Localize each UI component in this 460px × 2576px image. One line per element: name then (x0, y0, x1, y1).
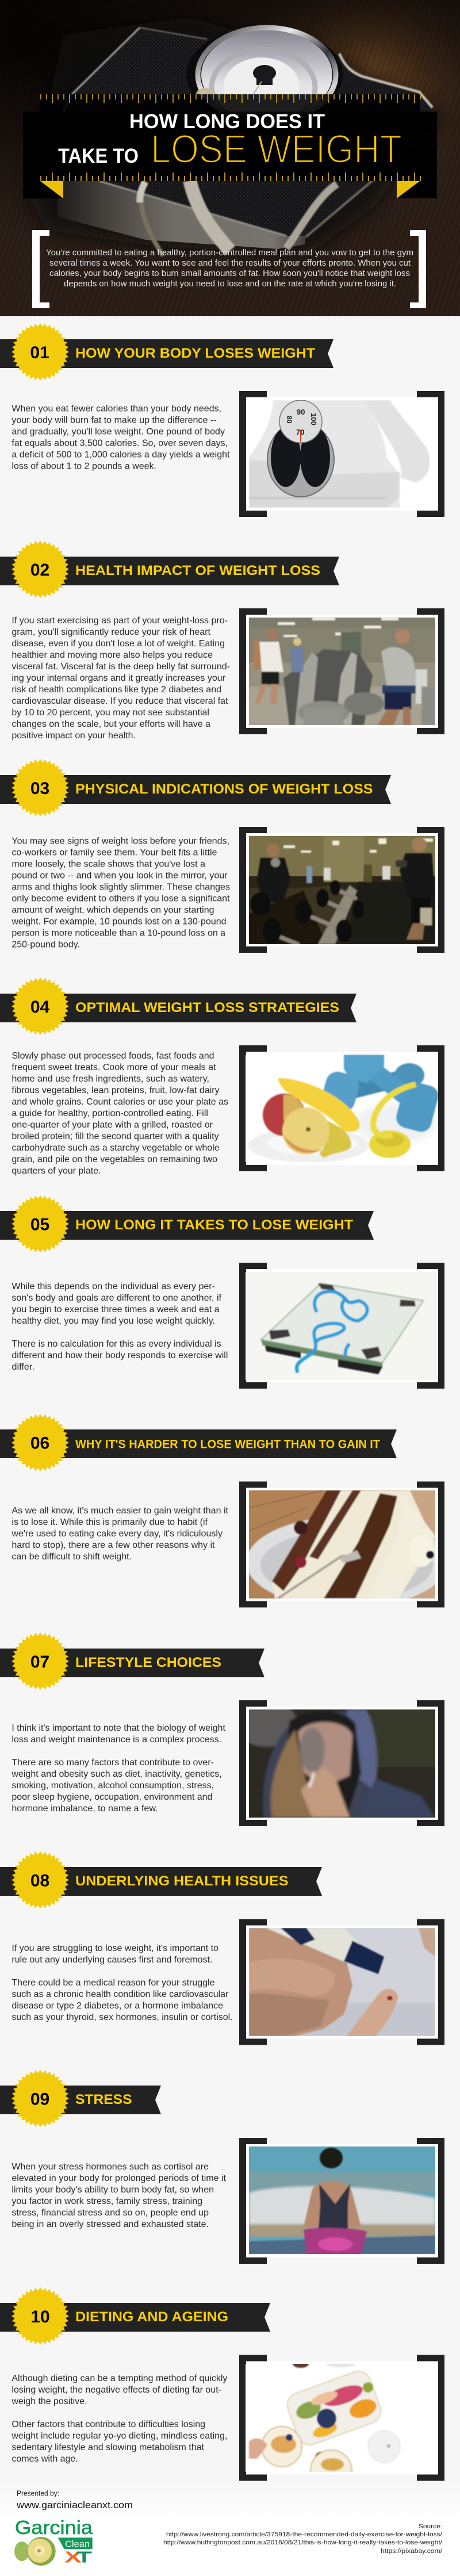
body text 07: There are so many factors that contribute to over- (12, 1758, 214, 1768)
ribbon heading 03: PHYSICAL INDICATIONS OF WEIGHT LOSS (75, 781, 373, 797)
intro text (46, 248, 413, 289)
man right (400, 853, 435, 899)
body text 02 (12, 616, 230, 741)
body text 10: Other factors that contribute to difficulties losing (12, 2420, 205, 2429)
body text 07: I think it's important to note that the biology of weight (12, 1723, 226, 1733)
body text 02: cardiovascular disease. If you reduce that visceral fat (12, 696, 228, 706)
plate (248, 1128, 369, 1163)
ribbon heading 07: LIFESTYLE CHOICES (75, 1655, 221, 1670)
number badge 10 (12, 2287, 69, 2345)
intro text: calories, your body begins to burn small amounts of fat. How soon you'll notice that weight loss (49, 269, 410, 278)
body text 07: smoking, motivation, alcohol consumption, stress, (12, 1781, 214, 1791)
ribbon heading 10: DIETING AND AGEING (75, 2309, 228, 2325)
section 10 (0, 2287, 444, 2491)
number badge 02 (12, 540, 69, 598)
ribbon heading 04 (0, 994, 356, 1022)
body text 07: hormone imbalance, to name a few. (12, 1804, 158, 1814)
section 01 (0, 323, 444, 517)
body text 09: limits your body's ability to burn body fat, so when (12, 2185, 214, 2195)
ribbon heading 09 (0, 2086, 161, 2114)
logo: Garcinia Clean XT: Garcinia (15, 2517, 93, 2538)
body text 01: fat equals about 3,500 calories. So, over seven days, (12, 438, 228, 448)
photo: gym ellipticals (249, 618, 435, 725)
number badge 03 (12, 759, 69, 816)
body text 08: such as a chronic health condition like cardiovascular (12, 1989, 229, 1999)
body text 03: 250-pound body. (12, 940, 80, 950)
banana (319, 1121, 351, 1158)
section 04 (0, 977, 444, 1176)
bracket frame 10 (239, 2355, 444, 2481)
number badge 04 (12, 977, 69, 1035)
footer credit: www.garciniacleanxt.com (16, 2500, 133, 2510)
photo: glass scale and blue tape (246, 1272, 438, 1380)
ribbon heading 05 (0, 1211, 374, 1240)
body text 06: hard to stop), there are a few other reasons why it (12, 1540, 215, 1550)
ribbon heading 01: HOW YOUR BODY LOSES WEIGHT (75, 346, 315, 361)
body text 02: changes on the scale, but your efforts will have a (12, 719, 210, 729)
logo: Garcinia Clean XT: Clean (65, 2539, 90, 2550)
number badge 08: 08 (30, 1871, 49, 1891)
source list (163, 2523, 443, 2555)
photo: dumbbell rack in gym (249, 836, 435, 944)
person left (259, 642, 283, 672)
logo: Garcinia Clean XT: T (76, 2548, 92, 2566)
body text 04: Slowly phase out processed foods, fast foods and (12, 1051, 214, 1061)
ribbon heading 03 (0, 775, 391, 804)
section 03 (0, 759, 444, 953)
ribbon heading 06: WHY IT'S HARDER TO LOSE WEIGHT THAN TO GAIN IT (75, 1438, 380, 1451)
source list: http://www.livestrong.com/article/375918-the-recommended-daily-exercise-for-weight-loss/ (166, 2531, 443, 2538)
section 09 (0, 2070, 444, 2264)
measuring tape (140, 91, 337, 256)
section 08 (0, 1851, 444, 2045)
number badge 01: 01 (30, 343, 49, 362)
body text 08: rule out any underlying causes first and foremost. (12, 1955, 212, 1965)
body text 06: can be difficult to shift weight. (12, 1552, 132, 1562)
body text 07 (11, 1723, 226, 1814)
body text 10: comes with age. (12, 2454, 78, 2464)
number badge 05 (12, 1195, 69, 1252)
ribbon heading 07 (0, 1649, 264, 1677)
body text 08: disease or type 2 diabetes, or a hormone imbalance (12, 2001, 223, 2011)
dumbbells (341, 1076, 409, 1094)
body text 10: weigh the positive. (11, 2397, 87, 2406)
number badge 06: 06 (30, 1434, 49, 1452)
body text 10: weight include regular yo-yo dieting, mindless eating, (11, 2431, 227, 2441)
body text 08: If you are struggling to lose weight, it's important to (12, 1943, 218, 1953)
photo: blood glucose lancet and finger (249, 1928, 435, 2036)
title (58, 110, 402, 171)
ribbon heading 08: UNDERLYING HEALTH ISSUES (75, 1873, 289, 1889)
bracket frame 08 (239, 1919, 444, 2045)
rack (249, 891, 327, 944)
scale illustration (267, 400, 334, 497)
ribbon heading 05: HOW LONG IT TAKES TO LOSE WEIGHT (75, 1217, 353, 1233)
scale illustration: 90 (297, 408, 305, 416)
body text 06: is to lose it. While this is primarily due to habit (if (12, 1517, 208, 1527)
body text 02: ing your internal organs and it greatly increases your (12, 673, 226, 683)
body text 03: You may see signs of weight loss before your friends, (12, 836, 229, 846)
body text 05: you begin to exercise three times a week and eat a (12, 1305, 220, 1314)
bracket frame 05 (239, 1263, 444, 1389)
body text 05: There is no calculation for this as every individual is (12, 1339, 221, 1349)
body text 01: and gradually, you'll lose weight. One pound of body (12, 427, 225, 436)
body text 04: one-quarter of your plate with a grilled, roasted or (12, 1120, 213, 1130)
body text 08: such as your thyroid, sex hormones, insulin or cortisol. (12, 2012, 233, 2022)
body text 05: son's body and goals are different to one another, if (12, 1293, 222, 1303)
body text 10: Although dieting can be a tempting method of quickly (12, 2374, 227, 2383)
section 02 (0, 540, 444, 741)
body text 03: more loosely, the scale shows that you've lost a (12, 859, 205, 869)
person right (381, 647, 419, 688)
source list: https://pixabay.com/ (381, 2548, 443, 2555)
number badge 05: 05 (30, 1216, 49, 1234)
body text 02: risk of health complications like type 2 diabetes and (12, 685, 221, 695)
red apple (263, 1094, 305, 1136)
body text 04 (12, 1051, 228, 1176)
body text 02: If you start exercising as part of your weight-loss pro- (12, 616, 228, 626)
ribbon heading 06 (0, 1429, 397, 1458)
yellow apple (282, 1107, 329, 1155)
body text 01: a deficit of 500 to 1,000 calories a day yields a weight (12, 450, 230, 459)
body text 02: positive impact on your health. (12, 731, 136, 741)
section 05 (0, 1195, 444, 1389)
body text 03: only become evident to others if you lose a significant (12, 894, 230, 904)
bracket frame 09 (239, 2138, 444, 2264)
logo: Garcinia Clean XT (14, 2517, 93, 2566)
body text 03: amount of weight, which depends on your starting (12, 905, 214, 915)
number badge 08 (12, 1851, 69, 1909)
photo: waist with scale (249, 400, 430, 508)
body text 02: healthier and moving more also helps you reduce (12, 650, 213, 660)
body text 01: When you eat fewer calories than your body needs, (12, 404, 221, 413)
body text 09: being in an overly stressed and exhausted state. (12, 2220, 209, 2229)
body text 07: loss and weight maintenance is a complex process. (12, 1735, 221, 1745)
photo: fruit platter from above (246, 2364, 401, 2472)
body text 03: weight. For example, 10 pounds lost on a 130-pound (11, 917, 227, 927)
body text 03 (11, 836, 230, 950)
ribbon heading 08 (0, 1867, 322, 1896)
body text 04: grain, and pile on the vegetables on remaining two (12, 1155, 217, 1164)
scale illustration: 80 (285, 416, 293, 424)
logo: Garcinia Clean XT: X (64, 2548, 82, 2566)
photo: fruit, dumbbells, tape (246, 1055, 438, 1162)
ribbon heading 01 (0, 339, 334, 368)
body text 05: While this depends on the individual as every per- (12, 1282, 215, 1291)
intro text: depends on how much weight you need to lose and on the rate at which you're losing it. (64, 279, 396, 289)
body text 06 (11, 1506, 229, 1562)
number badge 04: 04 (30, 998, 49, 1017)
hero panel (0, 0, 460, 316)
tape measure (369, 1130, 411, 1158)
ribbon heading 02: HEALTH IMPACT OF WEIGHT LOSS (75, 563, 320, 578)
body text 05: different and how their body responds to exercise will (12, 1351, 228, 1360)
number badge 09 (12, 2070, 69, 2128)
ruler title banner (23, 94, 437, 198)
number badge 01 (12, 323, 69, 381)
body text 04: and whole grains. Count calories or use your plate as (12, 1097, 228, 1107)
hero photo: bathroom scale on wood (0, 0, 460, 316)
body text 07: weight and obesity such as diet, inactivity, genetics, (11, 1769, 222, 1779)
body text 04: broiled protein; fill the second quarter with a quality (12, 1132, 219, 1141)
photo: woman meditating on beach (249, 2146, 435, 2254)
body text 02: gram, you'll significantly reduce your risk of heart (12, 627, 211, 637)
crowd (324, 866, 390, 880)
body text 09: When your stress hormones such as cortisol are (12, 2162, 209, 2172)
body text 10: sedentary lifestyle and slowing metabolism that (12, 2443, 205, 2452)
body text 06: we're used to eating cake every day, it's ridiculously (11, 1529, 223, 1539)
section 06 (0, 1414, 447, 1608)
bracket frame 04 (239, 1045, 444, 1171)
bracket frame 03 (239, 827, 444, 953)
bracket frame 06 (239, 1481, 444, 1608)
bracket frame 02 (239, 608, 444, 734)
title: TAKE TO (58, 145, 139, 167)
intro brackets (32, 230, 426, 308)
section 07 (0, 1632, 444, 1826)
photo: woman smoking (249, 1709, 435, 1818)
bracket frame 01 (239, 391, 444, 517)
body text 01: your body will burn fat to make up the difference -- (12, 415, 217, 425)
body text 08 (12, 1943, 233, 2022)
ribbon heading 09: STRESS (75, 2092, 132, 2107)
ribbon heading 04: OPTIMAL WEIGHT LOSS STRATEGIES (75, 1000, 339, 1015)
body text 03: person is more noticeable than a 10-pound loss on a (12, 928, 225, 938)
number badge 06 (12, 1414, 69, 1471)
body text 08: There could be a medical reason for your struggle (12, 1978, 215, 1988)
ribbon heading 10 (0, 2303, 270, 2332)
source list: Source: (419, 2523, 442, 2530)
body text 04: a guide for healthy, portion-controlled eating. Fill (12, 1109, 208, 1118)
body text 03: arms and thighs look slightly slimmer. These changes (12, 882, 230, 892)
body text 04: home and use fresh ingredients, such as watery, (12, 1074, 209, 1084)
body text 05 (12, 1282, 228, 1372)
number badge 07 (12, 1632, 69, 1690)
body text 02: visceral fat. Visceral fat is the deep belly fat surround- (12, 662, 230, 672)
body text 10 (11, 2374, 227, 2464)
intro text: You're committed to eating a healthy, portion-controlled meal plan and you vow to get to the gym (46, 248, 413, 258)
man left (257, 858, 290, 902)
body text 09 (12, 2162, 227, 2229)
source list: http://www.huffingtonpost.com.au/2016/08/21/this-is-how-long-it-really-takes-to-lose-weight/ (163, 2539, 443, 2546)
body text 04: carbohydrate such as a starchy vegetable or whole (12, 1143, 220, 1153)
ribbon heading 02 (0, 557, 339, 585)
number badge 09: 09 (30, 2090, 49, 2109)
body text 07: poor sleep hygiene, occupation, environment and (12, 1792, 212, 1802)
number badge 02: 02 (30, 561, 49, 580)
body text 06: As we all know, it's much easier to gain weight than it (12, 1506, 229, 1516)
title: HOW LONG DOES IT (129, 110, 325, 133)
body text 09: elevated in your body for prolonged periods of time it (12, 2174, 227, 2183)
person middle (293, 638, 301, 646)
intro text: several times a week. You want to see and feel the results of your efforts pronto. When you cut (49, 258, 411, 268)
body text 05: healthy diet, you may find you lose weight quickly. (12, 1316, 215, 1326)
photo: slice of cake (249, 1490, 435, 1598)
body text 03: co-workers or family see them. Your belt fits a little (12, 848, 217, 858)
number badge 10: 10 (30, 2307, 50, 2326)
body text 09: you factor in work stress, family stress, training (12, 2196, 202, 2206)
scale illustration: 100 (309, 413, 318, 425)
footer credit: Presented by: (17, 2490, 59, 2498)
scale dial (186, 26, 343, 125)
body text 09: stress, financial stress and so on, people end up (12, 2208, 209, 2218)
body text 01 (12, 404, 230, 471)
title: LOSE WEIGHT (151, 126, 402, 171)
body text 02: by 10 to 20 percent, you may not see substantial (12, 708, 209, 718)
number badge 07: 07 (30, 1653, 49, 1672)
icon: garcinia fruit (14, 2537, 56, 2566)
body text 02: disease, even if you don't lose a lot of weight. Eating (12, 639, 225, 649)
ribbon fold triangles (40, 181, 420, 198)
footer credit (16, 2490, 133, 2510)
body text 04: fibrous vegetables, lean proteins, fruit, low-fat dairy (12, 1086, 220, 1095)
body text 05: differ. (12, 1362, 34, 1372)
body text 04: quarters of your plate. (12, 1166, 101, 1176)
number badge 03: 03 (30, 779, 49, 798)
body text 03: pound or two -- and when you look in the mirror, your (12, 871, 228, 881)
scale illustration: 70 (296, 428, 304, 436)
body text 04: frequent sweet treats. Cook more of your meals at (12, 1063, 216, 1072)
body text 10: losing weight, the negative effects of dieting far out- (12, 2385, 221, 2395)
body text 01: loss of about 1 to 2 pounds a week. (12, 461, 156, 471)
bracket frame 07 (239, 1700, 444, 1826)
